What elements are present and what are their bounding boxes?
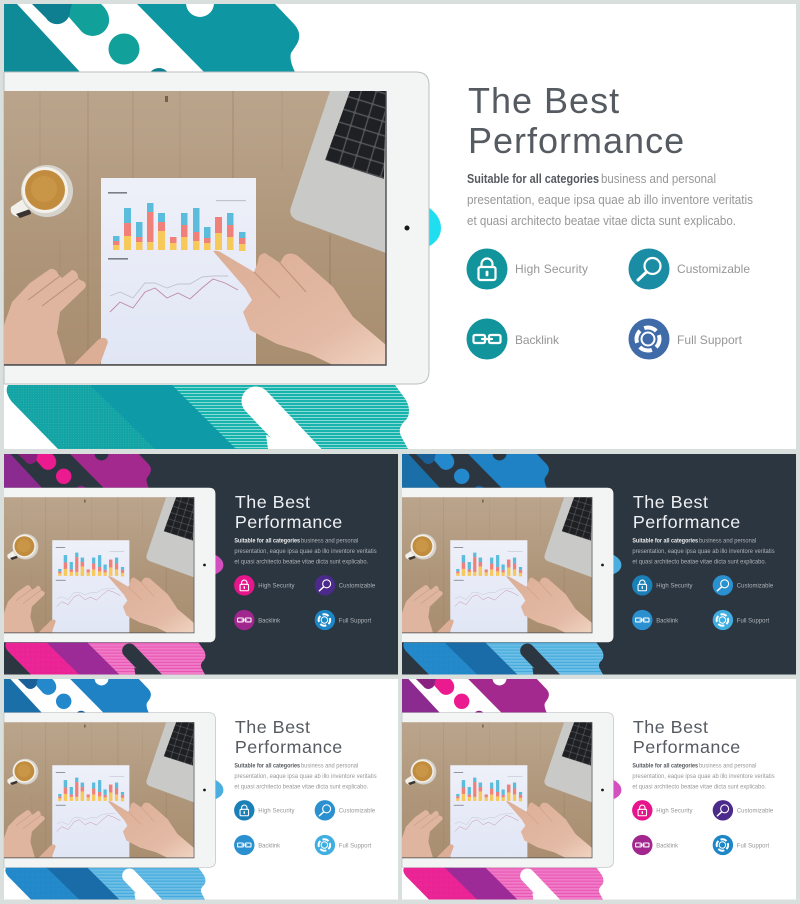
description: Suitable for all categories	[467, 172, 599, 186]
title	[468, 80, 685, 161]
feature: Customizable: Customizable	[339, 583, 376, 589]
feature: High Security: High Security	[515, 262, 588, 276]
tablet home button	[203, 564, 206, 566]
feature: Customizable	[713, 800, 774, 820]
feature: Backlink	[234, 835, 280, 855]
top decorative shapes	[4, 679, 151, 712]
bottom decorative shapes	[5, 868, 206, 900]
feature: Full Support	[713, 835, 769, 855]
feature: Full Support: Full Support	[339, 618, 371, 624]
panel: light magenta slide	[402, 672, 796, 904]
description: business and personal	[601, 172, 716, 186]
feature: Backlink	[632, 835, 678, 855]
feature: Full Support	[713, 610, 769, 630]
description: et quasi architecto beatae vitae dicta sunt explicabo.	[467, 214, 736, 228]
blue tab behind tablet	[613, 555, 621, 574]
title	[633, 492, 741, 532]
description: Suitable for all categories	[234, 763, 300, 770]
title: The Best	[468, 80, 620, 121]
tablet home button	[203, 789, 206, 791]
bottom decorative shapes	[403, 642, 604, 674]
feature: Customizable: Customizable	[339, 808, 376, 814]
top decorative shapes	[402, 454, 549, 488]
panel: light blue slide	[4, 672, 398, 904]
photo on tablet screen	[402, 722, 592, 858]
bottom decorative shapes	[5, 642, 206, 674]
slide background	[402, 454, 796, 674]
title: Performance	[633, 737, 741, 757]
feature: Full Support: Full Support	[737, 618, 769, 624]
feature: High Security: High Security	[258, 583, 295, 589]
feature: Backlink	[632, 610, 678, 630]
photo on tablet screen	[402, 497, 592, 633]
feature: Customizable: Customizable	[737, 583, 774, 589]
description	[234, 763, 377, 791]
description: business and personal	[301, 538, 358, 545]
slide background	[4, 4, 796, 449]
feature: Customizable	[713, 575, 774, 595]
feature: High Security	[234, 575, 295, 595]
title	[633, 717, 741, 757]
description: Suitable for all categories	[632, 538, 698, 545]
feature: Full Support: Full Support	[677, 333, 743, 347]
description: business and personal	[699, 538, 756, 545]
cyan tab behind tablet	[428, 207, 441, 247]
description: presentation, eaque ipsa quae ab illo inventore veritatis	[234, 548, 377, 555]
feature: Customizable: Customizable	[737, 808, 774, 814]
title: The Best	[235, 492, 310, 512]
feature: High Security: High Security	[656, 808, 693, 814]
description: presentation, eaque ipsa quae ab illo inventore veritatis	[632, 773, 775, 780]
feature: High Security: High Security	[258, 808, 295, 814]
description: et quasi architecto beatae vitae dicta sunt explicabo.	[632, 784, 766, 791]
description	[632, 763, 775, 791]
panel: dark blue slide	[402, 447, 796, 680]
feature: Full Support	[315, 610, 371, 630]
feature: Full Support: Full Support	[339, 843, 371, 849]
feature: Customizable	[315, 575, 376, 595]
description: et quasi architecto beatae vitae dicta sunt explicabo.	[234, 784, 368, 791]
feature: High Security	[234, 800, 295, 820]
slide background	[402, 679, 796, 899]
title: Performance	[235, 737, 343, 757]
tablet body	[402, 488, 613, 642]
feature: High Security	[466, 248, 588, 290]
description: et quasi architecto beatae vitae dicta sunt explicabo.	[234, 559, 368, 566]
tablet home button	[601, 789, 604, 791]
title	[235, 492, 343, 532]
feature: High Security	[632, 800, 693, 820]
top decorative shapes	[4, 454, 151, 488]
magenta tab behind tablet	[215, 555, 223, 574]
tablet home button	[404, 226, 410, 230]
description: business and personal	[301, 763, 358, 770]
top decorative shapes	[402, 679, 549, 712]
feature: Backlink: Backlink	[656, 843, 678, 849]
tablet home button	[601, 564, 604, 566]
title: The Best	[633, 717, 708, 737]
bottom decorative shapes	[403, 868, 604, 900]
feature: Backlink: Backlink	[258, 843, 280, 849]
description: presentation, eaque ipsa quae ab illo inventore veritatis	[632, 548, 775, 555]
feature: Customizable	[628, 248, 750, 290]
tablet body	[4, 713, 215, 867]
title: Performance	[235, 512, 343, 532]
title	[235, 717, 343, 757]
description: business and personal	[699, 763, 756, 770]
feature: Customizable	[315, 800, 376, 820]
description: presentation, eaque ipsa quae ab illo inventore veritatis	[234, 773, 377, 780]
feature: High Security: High Security	[656, 583, 693, 589]
feature: Backlink: Backlink	[515, 333, 560, 347]
feature: Customizable: Customizable	[677, 262, 750, 276]
title: Performance	[633, 512, 741, 532]
description: Suitable for all categories	[632, 763, 698, 770]
tablet body	[402, 713, 613, 867]
slide background	[4, 454, 398, 674]
feature: Backlink: Backlink	[258, 618, 280, 624]
tablet body	[4, 488, 215, 642]
description	[632, 538, 775, 566]
panel: dark magenta slide	[4, 447, 398, 680]
description: et quasi architecto beatae vitae dicta sunt explicabo.	[632, 559, 766, 566]
feature: Full Support: Full Support	[737, 843, 769, 849]
description	[467, 172, 753, 228]
feature: Full Support	[628, 318, 743, 360]
tablet body	[4, 72, 429, 384]
title: Performance	[468, 120, 685, 161]
photo on tablet screen	[4, 497, 194, 633]
feature: Backlink	[466, 318, 560, 360]
feature: Backlink: Backlink	[656, 618, 678, 624]
feature: Backlink	[234, 610, 280, 630]
feature: Full Support	[315, 835, 371, 855]
feature: High Security	[632, 575, 693, 595]
description: presentation, eaque ipsa quae ab illo inventore veritatis	[467, 193, 753, 207]
description: Suitable for all categories	[234, 538, 300, 545]
panel: main light teal slide	[4, 0, 796, 460]
photo on tablet screen	[4, 91, 386, 365]
description	[234, 538, 377, 566]
photo on tablet screen	[4, 722, 194, 858]
slide background	[4, 679, 398, 899]
bottom decorative shapes	[6, 385, 409, 449]
magenta tab behind tablet	[613, 780, 621, 799]
title: The Best	[633, 492, 708, 512]
blue tab behind tablet	[215, 780, 223, 799]
title: The Best	[235, 717, 310, 737]
top decorative shapes	[4, 4, 300, 72]
